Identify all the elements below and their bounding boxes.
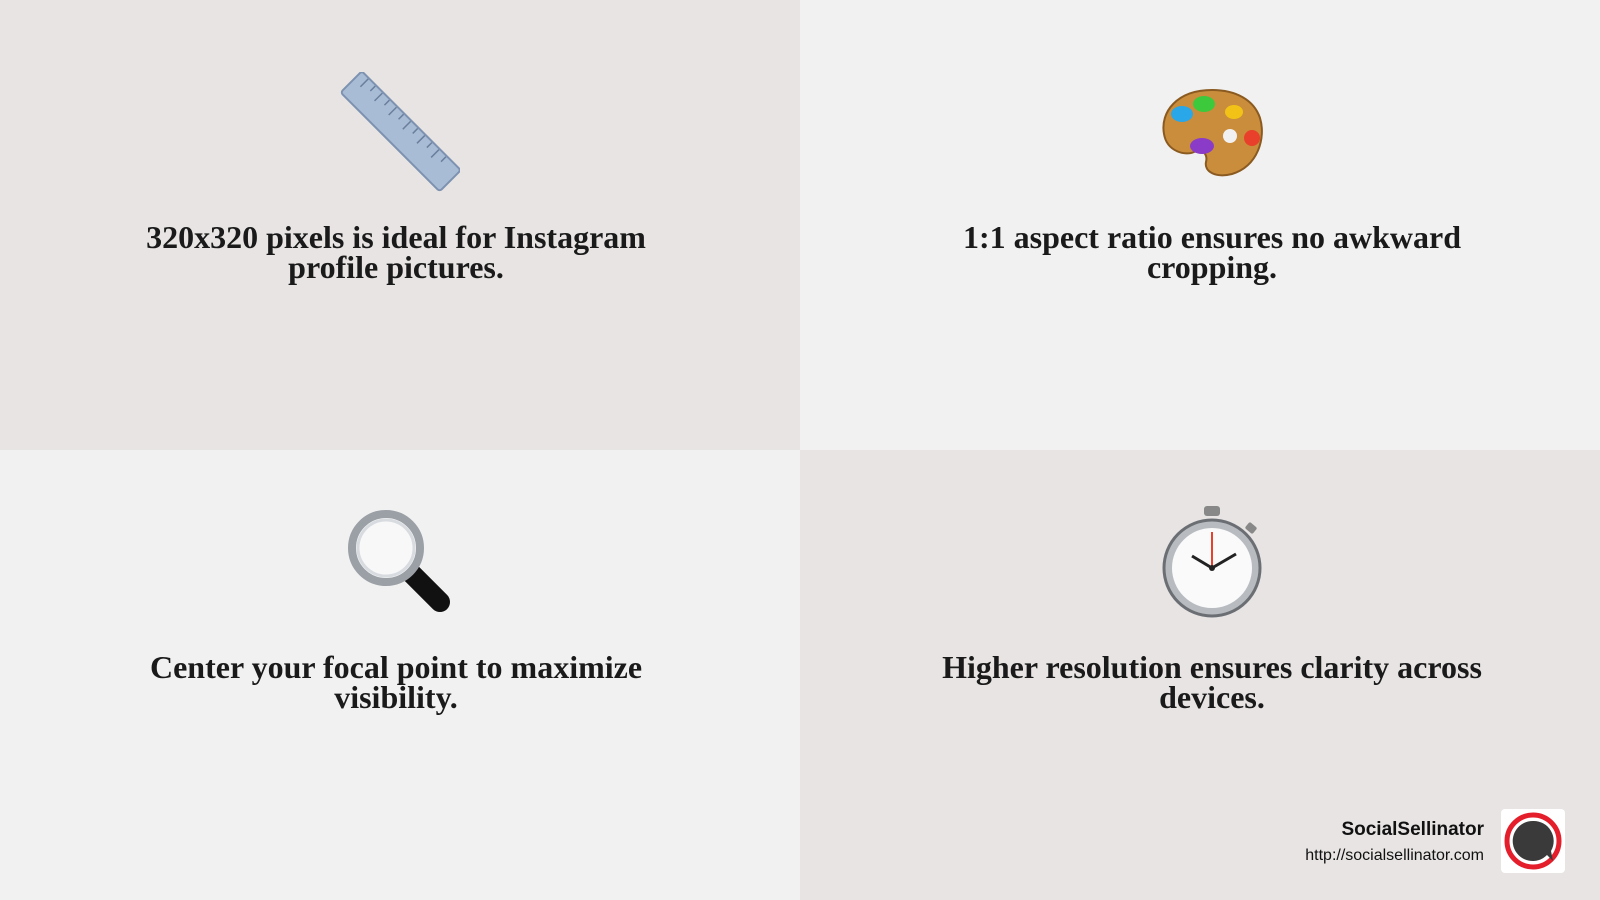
icon: stopwatch: [1162, 506, 1262, 618]
text: pixels: [146, 219, 646, 285]
brand text: SocialSellinator: [1341, 819, 1484, 840]
text: resolution: [942, 649, 1482, 715]
text: pixels: profile pictures.: [288, 249, 504, 285]
logo: [1501, 809, 1565, 873]
text: resolution: Higher resolution ensures clarity across: [942, 649, 1482, 685]
icon: palette: [1162, 89, 1263, 176]
text: aspect ratio: [963, 219, 1461, 285]
icon: magnifier: [348, 510, 450, 612]
brand text: http://socialsellinator.com: [1305, 847, 1484, 864]
text: focal point: [150, 649, 642, 715]
panel: pixels: [0, 0, 800, 450]
text: aspect ratio: 1:1 aspect ratio ensures no awkward: [963, 219, 1461, 255]
panel: aspect ratio: [800, 0, 1600, 450]
panel: focal point: [0, 450, 800, 900]
text: focal point: Center your focal point to maximize: [150, 649, 642, 685]
text: resolution: devices.: [1159, 679, 1265, 715]
icon: ruler: [340, 72, 460, 192]
text: pixels: 320x320 pixels is ideal for Instagram: [146, 219, 646, 255]
text: focal point: visibility.: [334, 679, 458, 715]
brand text: [1305, 819, 1484, 864]
panel: resolution: [800, 450, 1600, 900]
text: aspect ratio: cropping.: [1147, 249, 1277, 285]
